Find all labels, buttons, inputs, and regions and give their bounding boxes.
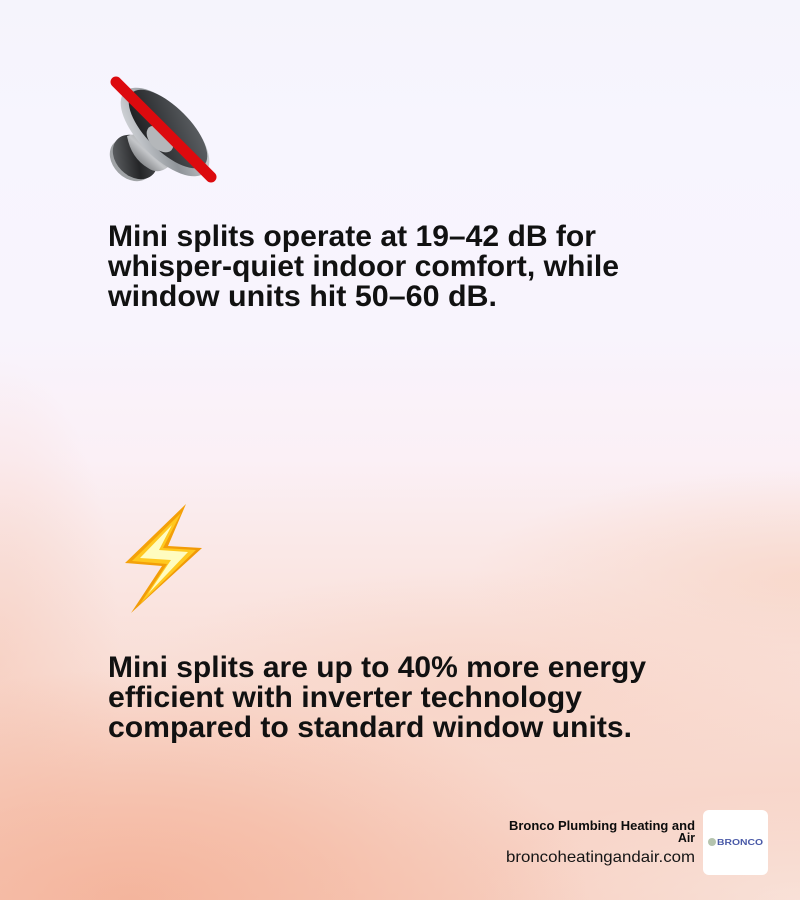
icon: lightning bolt — [125, 504, 202, 613]
speaker magnet — [101, 126, 168, 190]
footer: website: broncoheatingandair.com — [506, 849, 695, 866]
text block: noise: Mini splits operate at 19–42 dB for — [108, 220, 597, 253]
text block: noise — [107, 220, 619, 313]
icon: muted speaker — [101, 73, 224, 191]
footer: logo — [703, 810, 768, 875]
red slash — [116, 82, 211, 177]
logo wordmark: BRONCO — [717, 838, 763, 847]
footer: company name: Bronco Plumbing Heating and — [509, 818, 695, 833]
text block: noise: whisper-quiet indoor comfort, while — [107, 250, 619, 283]
text block: energy: efficient with inverter technology — [108, 681, 583, 714]
footer: company name: Air — [678, 830, 695, 845]
footer: company name — [509, 818, 695, 845]
text block: noise: window units hit 50–60 dB. — [107, 280, 497, 313]
text block: energy: Mini splits are up to 40% more energy — [108, 651, 647, 684]
logo mark — [708, 838, 716, 846]
speaker cone — [106, 73, 224, 191]
text block: energy — [108, 651, 647, 744]
text block: energy: compared to standard window units. — [108, 711, 632, 744]
